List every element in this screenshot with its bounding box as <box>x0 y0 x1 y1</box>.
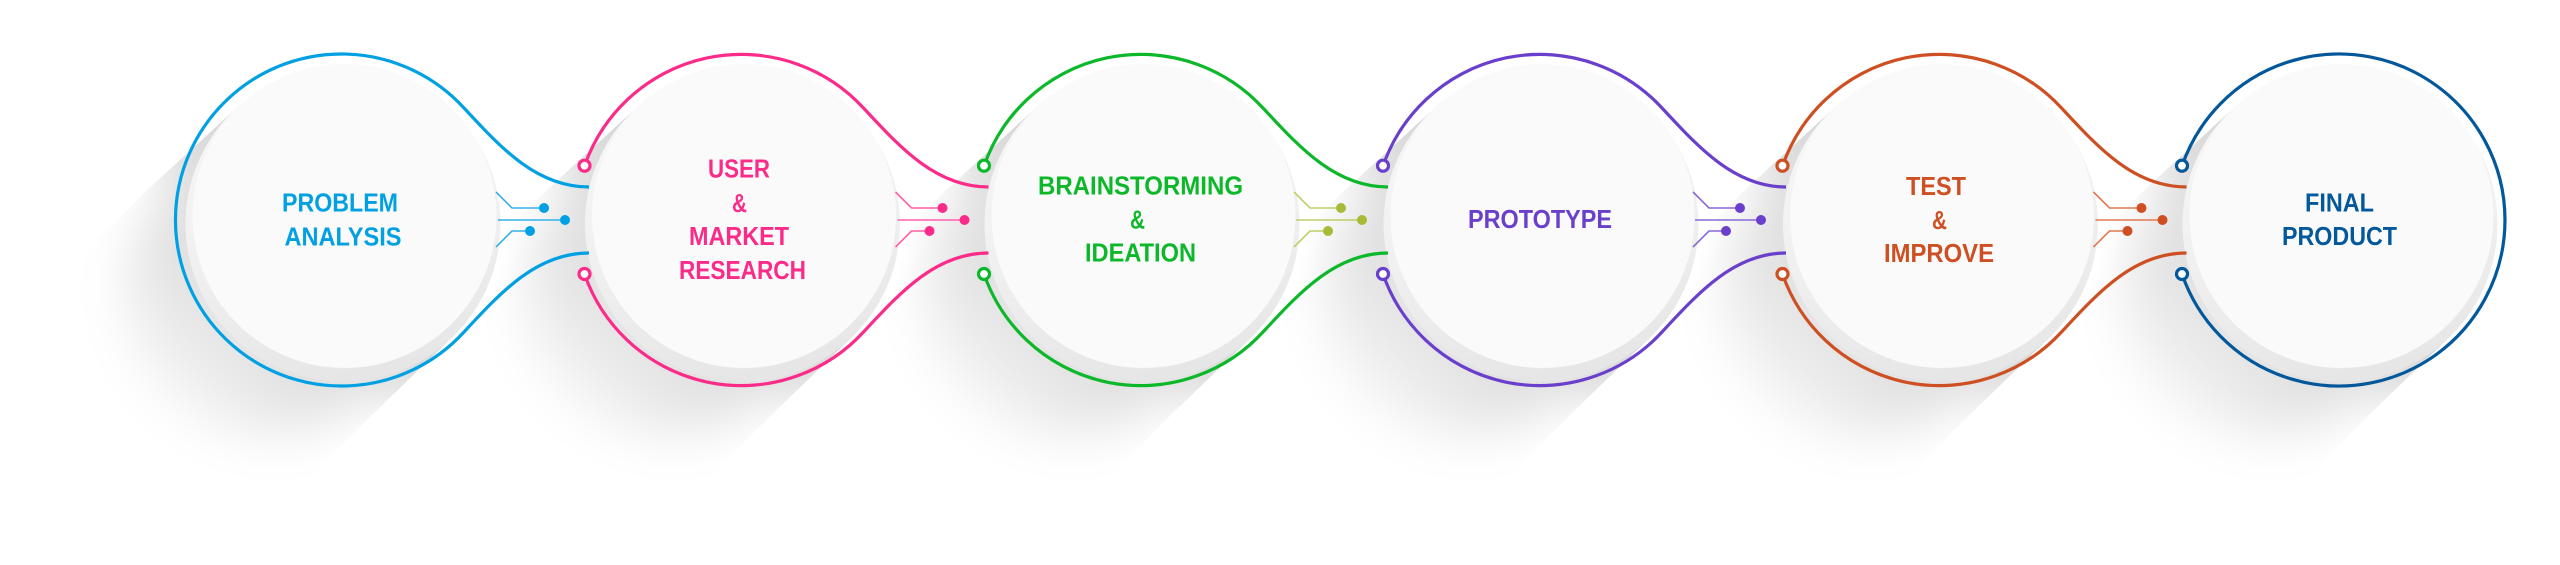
halo <box>1370 50 1710 390</box>
circuit connector <box>1693 192 1766 247</box>
circuit connector <box>496 192 570 247</box>
label <box>1884 171 1994 268</box>
label: & <box>1932 205 1947 235</box>
circuit connector <box>2094 192 2168 247</box>
label <box>1038 170 1243 268</box>
outline ring <box>2176 54 2505 386</box>
halo <box>572 50 912 390</box>
label: & <box>732 188 747 218</box>
disk <box>585 64 900 382</box>
disk <box>186 64 500 382</box>
label: IDEATION <box>1085 238 1196 268</box>
circuit connector <box>896 192 970 247</box>
outline ring <box>1378 54 1786 386</box>
outline ring <box>579 54 988 386</box>
halo <box>172 50 512 390</box>
circuit connector <box>1294 192 1367 247</box>
outline ring <box>1777 54 2186 386</box>
label <box>282 188 402 252</box>
label: & <box>1130 204 1145 234</box>
label: PRODUCT <box>2282 221 2397 251</box>
label: PROBLEM <box>282 188 398 218</box>
process flow diagram <box>121 52 2507 441</box>
step 3: brainstorming and ideation <box>920 52 1388 441</box>
disk <box>984 64 1300 382</box>
long shadow <box>1319 113 1646 441</box>
label <box>679 154 806 285</box>
outline ring <box>175 54 589 386</box>
label: ANALYSIS <box>284 222 402 252</box>
label: FINAL <box>2305 188 2374 218</box>
long shadow <box>920 113 1249 441</box>
label: MARKET <box>689 221 789 251</box>
long shadow <box>2118 113 2446 441</box>
label: IMPROVE <box>1884 238 1994 268</box>
disk <box>2182 64 2498 382</box>
long shadow <box>1718 113 2048 441</box>
label <box>2282 188 2397 251</box>
disk <box>1783 64 2098 382</box>
step 5: test and improve <box>1718 52 2186 441</box>
disk <box>1384 64 1698 382</box>
step 2: user and market research <box>520 52 988 441</box>
label: TEST <box>1906 171 1966 201</box>
label: PROTOTYPE <box>1468 204 1612 234</box>
step 6: final product <box>2118 52 2507 441</box>
label: RESEARCH <box>679 255 806 285</box>
outline ring <box>978 54 1388 386</box>
step 1: problem analysis <box>121 52 589 441</box>
halo <box>971 50 1311 390</box>
label: USER <box>708 154 770 184</box>
step 4: prototype <box>1319 52 1786 441</box>
long shadow <box>121 113 450 441</box>
label: BRAINSTORMING <box>1038 170 1243 200</box>
halo <box>1770 50 2110 390</box>
long shadow <box>520 113 850 441</box>
